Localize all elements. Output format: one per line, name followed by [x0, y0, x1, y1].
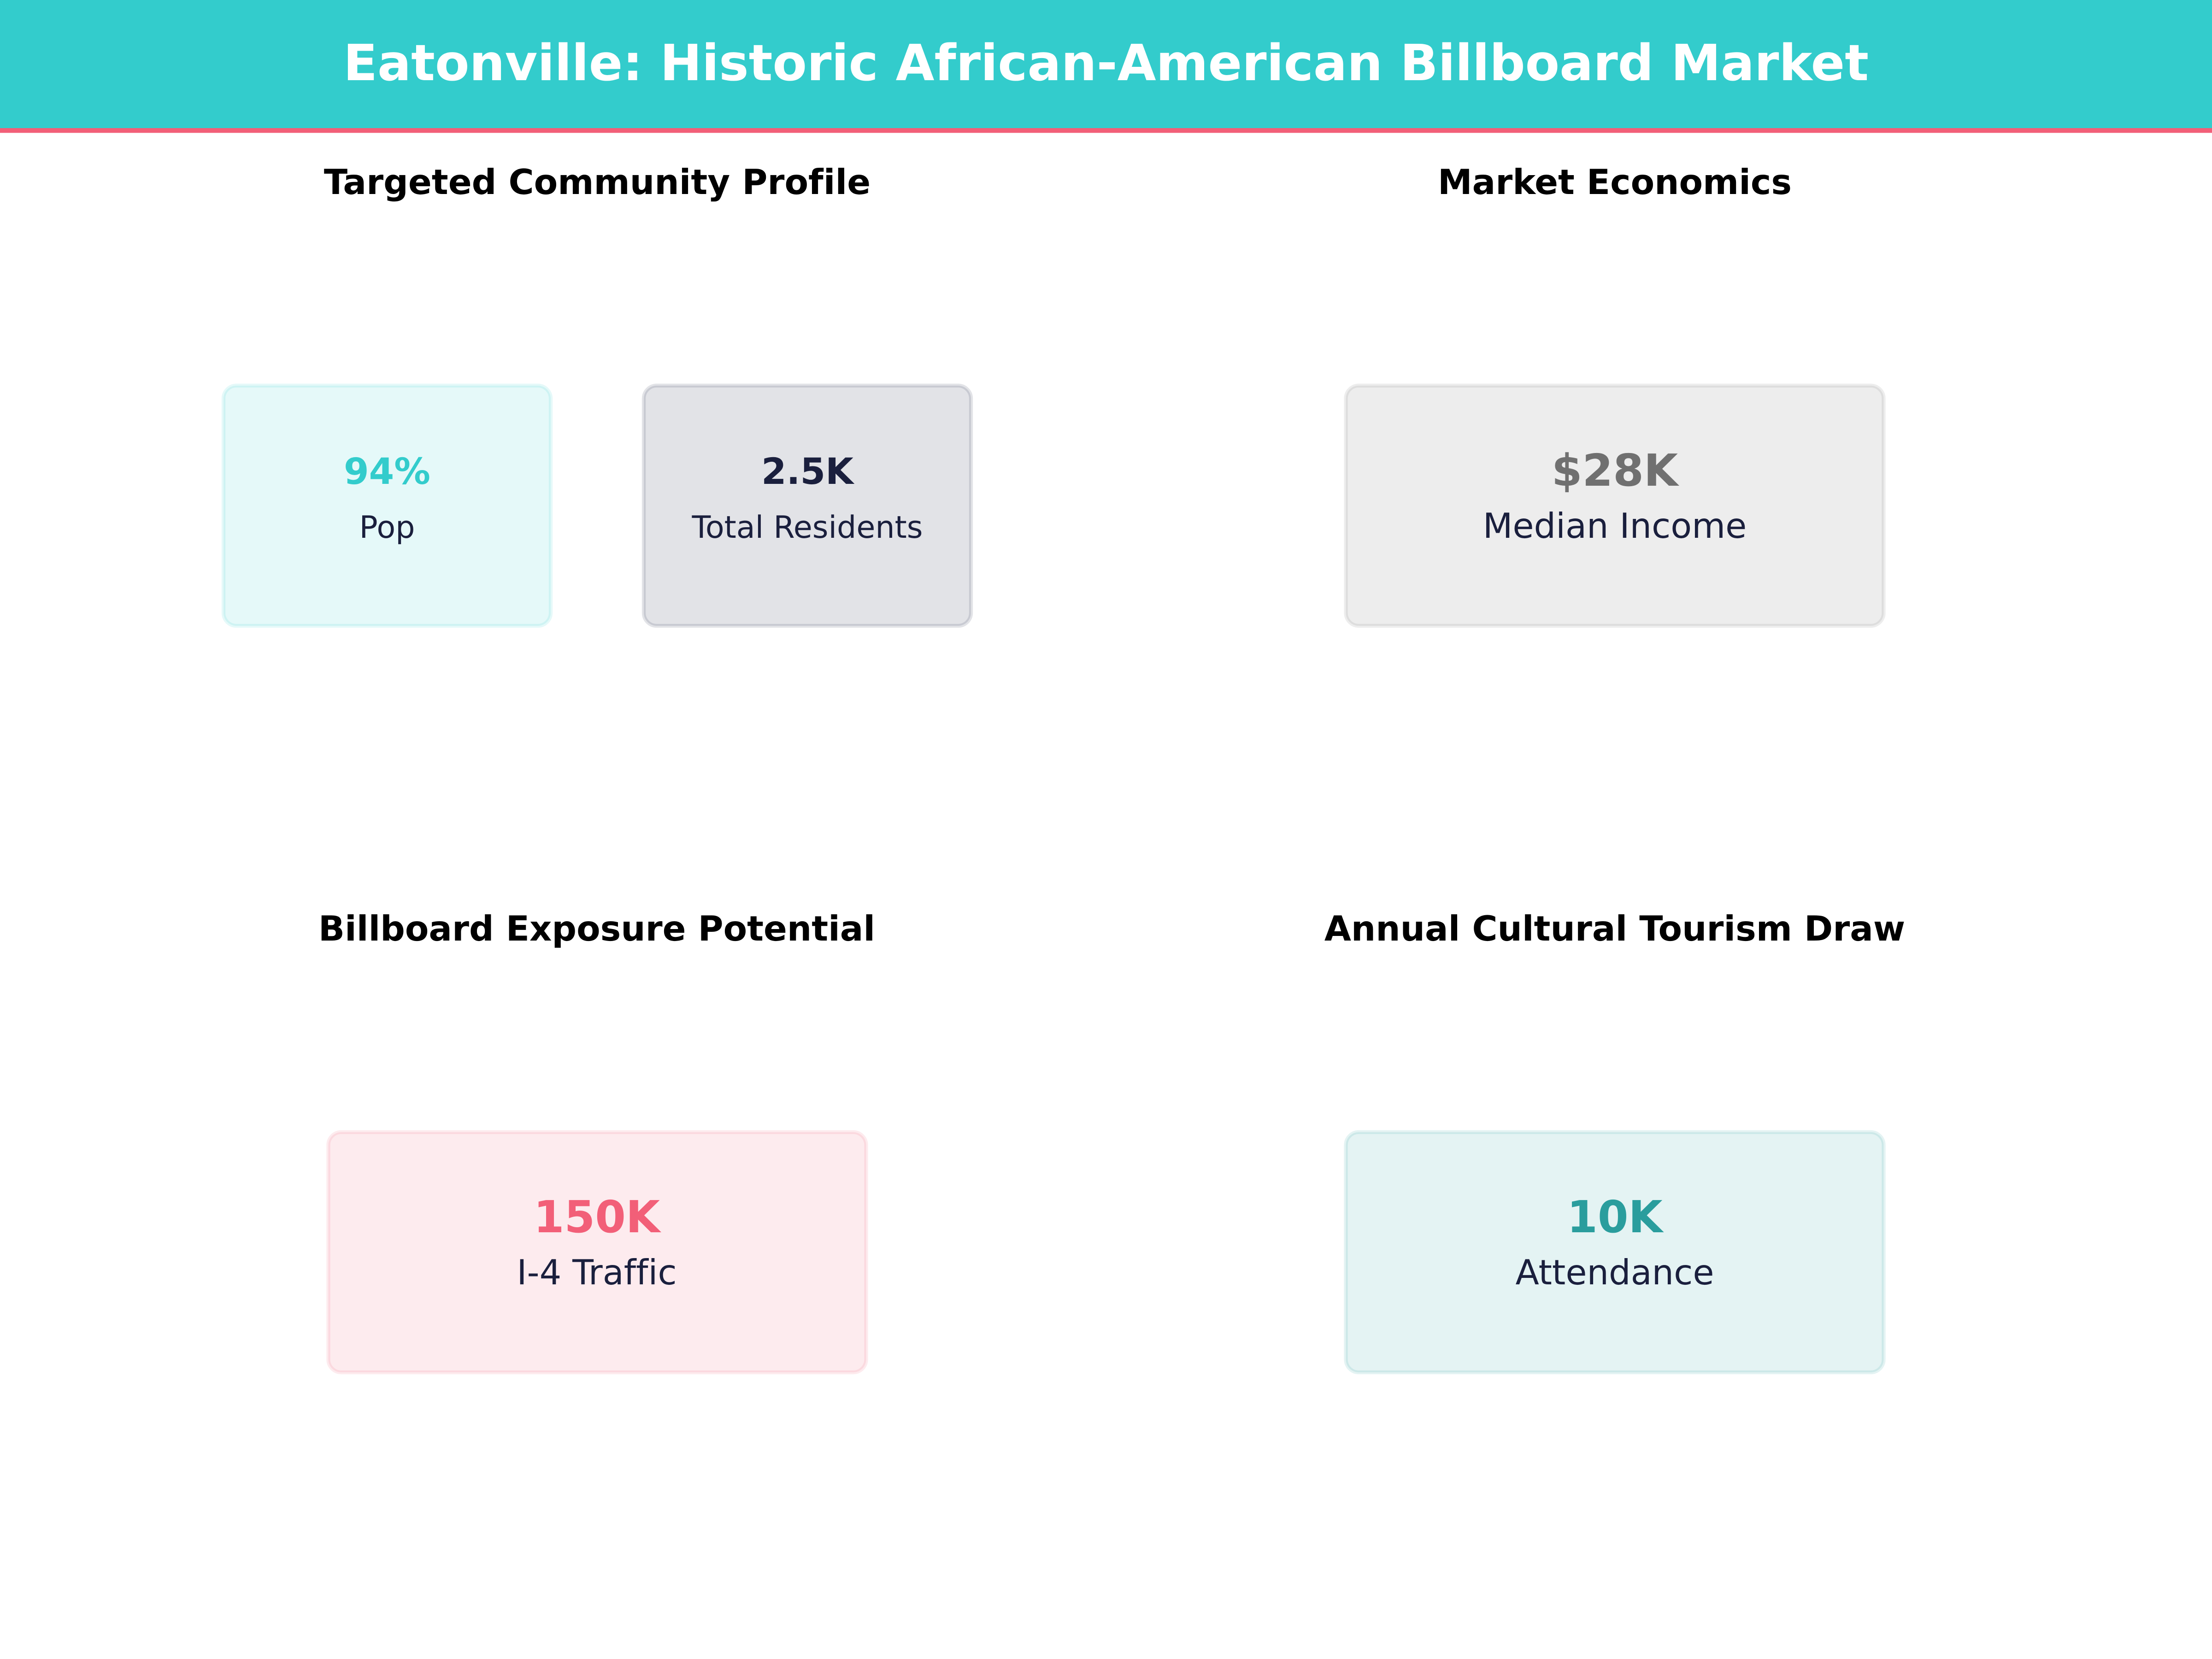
panel: annual cultural tourism draw [1324, 908, 1905, 1372]
stat card: $28K median income [1346, 386, 1884, 626]
stat card: 2.5K total residents: 2.5K [761, 450, 855, 493]
stat card: 150K I-4 traffic [328, 1132, 866, 1372]
stat card: 10K attendance: 10K [1567, 1191, 1665, 1243]
stat card: 94% pop: Pop [359, 509, 415, 545]
panel: billboard exposure potential [318, 908, 875, 1372]
header banner [0, 0, 2212, 133]
panel: market economics [1346, 162, 1884, 626]
stat card: $28K median income: Median Income [1483, 506, 1747, 546]
stat card: 94% pop: 94% [344, 450, 430, 493]
stat card: 10K attendance: Attendance [1516, 1252, 1714, 1293]
stat card: 2.5K total residents [644, 386, 971, 626]
heading: billboard exposure potential: Billboard Exposure Potential [318, 908, 875, 949]
stat card: 10K attendance [1346, 1132, 1884, 1372]
heading: market economics: Market Economics [1438, 162, 1792, 202]
heading: targeted community profile: Targeted Community Profile [324, 162, 871, 202]
title: Eatonville: Historic African-American Billboard Market [343, 34, 1869, 92]
stat card: 150K I-4 traffic: 150K [534, 1191, 662, 1243]
stat card: 2.5K total residents: Total Residents [691, 509, 923, 545]
heading: annual cultural tourism draw: Annual Cultural Tourism Draw [1324, 908, 1905, 949]
stat card: $28K median income: $28K [1552, 445, 1680, 496]
panel: targeted community profile [224, 162, 971, 626]
stat card: 94% pop [224, 386, 551, 626]
stat card: 150K I-4 traffic: I-4 Traffic [517, 1252, 677, 1293]
